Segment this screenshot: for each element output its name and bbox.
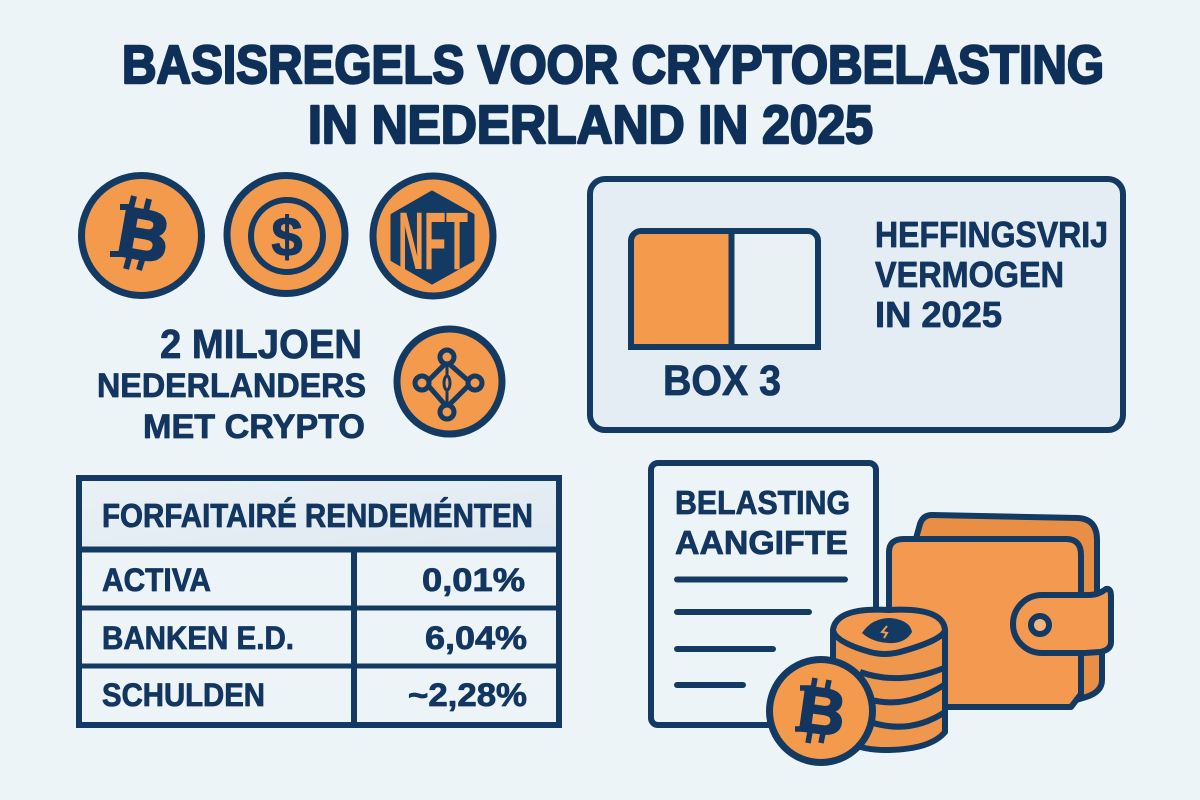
wallet clasp: [1013, 589, 1111, 653]
row: activa: [102, 562, 525, 598]
heffingsvrij text: [875, 214, 1108, 335]
table: forfaitaire rendementen: [79, 478, 559, 725]
document: belasting aangifte: AANGIFTE: [675, 524, 848, 561]
icon: NFT coin: NFT: [398, 196, 468, 287]
heffingsvrij text: HEFFINGSVRIJ: [875, 214, 1108, 255]
title: BASISREGELS VOOR CRYPTOBELASTING: [122, 35, 1104, 95]
table header: [82, 481, 556, 549]
stat text: 2 miljoen: MET CRYPTO: [143, 408, 365, 446]
row: banken: 6,04%: [425, 620, 527, 656]
row: schulden: [102, 677, 527, 713]
icon: front bitcoin coin: [770, 660, 872, 762]
icon: network coin: [397, 329, 502, 434]
wallet front: [889, 539, 1081, 707]
heffingsvrij text: IN 2025: [875, 294, 1002, 335]
row: banken: BANKEN E.D.: [102, 620, 294, 656]
icon: box 3 split rectangle: [631, 231, 818, 347]
row: activa: 0,01%: [422, 562, 525, 598]
icon: dollar coin: [227, 176, 345, 294]
row: schulden: ~2,28%: [408, 677, 527, 713]
title: [122, 35, 1104, 155]
icon: front bitcoin coin: B: [794, 672, 850, 750]
stat text: 2 miljoen: [97, 321, 366, 446]
row: banken: [102, 620, 527, 656]
box 3 label: BOX 3: [663, 357, 781, 405]
row: activa: ACTIVA: [102, 562, 211, 598]
document: belasting aangifte: [651, 463, 876, 725]
document: belasting aangifte: BELASTING: [675, 484, 850, 521]
icon: wallet: [889, 515, 1111, 707]
panel: box 3: [590, 179, 1123, 430]
title: IN NEDERLAND IN 2025: [308, 95, 873, 155]
stat text: 2 miljoen: 2 MILJOEN: [160, 321, 362, 367]
table header: FORFAITAIRÉ RENDEMÉNTEN: [102, 497, 533, 534]
row: schulden: SCHULDEN: [102, 677, 265, 713]
wallet back: [915, 515, 1102, 705]
icon: NFT coin: [373, 176, 493, 296]
icon: coin stack: [833, 610, 945, 750]
stat text: 2 miljoen: NEDERLANDERS: [97, 367, 366, 405]
icon: dollar coin: $: [271, 205, 303, 268]
icon: bitcoin coin: B: [112, 192, 175, 278]
heffingsvrij text: VERMOGEN: [875, 254, 1064, 295]
icon: bitcoin coin: [82, 176, 202, 296]
